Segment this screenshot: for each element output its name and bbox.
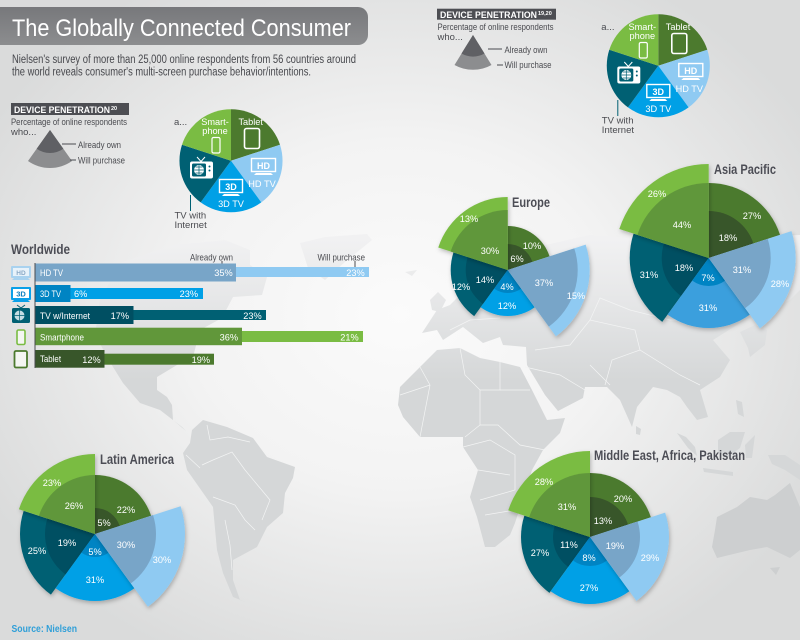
legend: device pie left: Internet xyxy=(174,220,207,231)
bar: 3D TV: 3D TV xyxy=(40,289,62,299)
legend: device pie left: Smart- xyxy=(201,117,229,127)
legend: device penetration left: Will purchase xyxy=(78,156,125,166)
values: 28% xyxy=(535,477,553,487)
bar: TV with internet: 23% xyxy=(243,311,262,321)
bar: tablet: 12% xyxy=(82,355,101,365)
values: 31% xyxy=(699,303,717,313)
legend: device pie right: 3D xyxy=(653,87,665,97)
legend: device pie right: Internet xyxy=(602,125,634,136)
icon: TV with internet xyxy=(12,305,30,323)
bar: smartphone: 21% xyxy=(340,332,359,342)
bar: HD TV: 23% xyxy=(346,268,365,278)
wedge: tablet xyxy=(590,473,651,537)
bar: smartphone: Smartphone xyxy=(40,332,84,342)
wedge: tablet xyxy=(95,475,151,534)
values: 27% xyxy=(531,548,549,558)
values: 28% xyxy=(771,279,789,289)
values: 12% xyxy=(498,301,516,311)
source note: Source: Nielsen xyxy=(12,624,77,635)
values: 12% xyxy=(452,282,470,292)
wedge: smartphone xyxy=(508,433,615,537)
intro text: the world reveals consumer's multi-screen purchase behavior/intentions. xyxy=(12,66,311,78)
legend: device penetration left xyxy=(10,103,129,168)
bar: tablet: Tablet xyxy=(40,354,61,364)
title banner: The Globally Connected Consumer xyxy=(12,15,351,42)
bar: 3D TV: 6% xyxy=(74,289,87,299)
wedge: smartphone xyxy=(438,181,529,270)
legend: device penetration left: who... xyxy=(10,127,36,138)
legend: device penetration right: Already own xyxy=(504,45,548,56)
wedge: HD TV xyxy=(590,513,688,608)
values xyxy=(452,214,585,311)
wedge: 3D TV xyxy=(655,258,750,354)
wedge: 3D TV xyxy=(538,537,629,629)
key labels: Will purchase xyxy=(318,252,365,264)
values: 13% xyxy=(460,214,478,224)
values: 22% xyxy=(117,505,135,515)
wedge: 3D TV xyxy=(43,534,134,626)
intro text: Nielsen's survey of more than 25,000 online respondents from 56 countries around xyxy=(12,54,356,66)
legend: device pie right: TV with xyxy=(602,116,633,126)
map country borders xyxy=(186,298,740,570)
wedge: TV with internet xyxy=(0,492,95,595)
key labels xyxy=(190,252,365,267)
values: 26% xyxy=(648,189,666,199)
values: 30% xyxy=(153,555,171,565)
wedge: TV with internet xyxy=(430,238,508,316)
bar: smartphone xyxy=(36,328,363,345)
wedge: HD TV xyxy=(709,231,800,337)
legend: device pie left: a... xyxy=(174,117,187,128)
values xyxy=(28,478,171,585)
values: 27% xyxy=(580,583,598,593)
legend: device penetration right xyxy=(436,9,556,71)
values: 10% xyxy=(523,241,541,251)
heading: Middle East, Africa, Pakistan: Middle East, Africa, Pakistan xyxy=(594,448,745,463)
values: 19% xyxy=(58,538,76,548)
values xyxy=(640,189,789,313)
legend: device pie right: Tablet xyxy=(666,22,691,32)
wedge: 3D TV xyxy=(472,270,535,333)
legend: device pie left: 3D TV xyxy=(218,199,245,209)
chart: Latin America xyxy=(0,437,207,626)
values: 31% xyxy=(640,270,658,280)
intro text xyxy=(12,54,356,78)
bar: HD TV xyxy=(36,264,369,282)
values: 5% xyxy=(97,518,111,528)
heading: Europe: Europe xyxy=(512,195,550,210)
icon: HD TV xyxy=(11,266,31,280)
wedge: TV with internet xyxy=(496,498,590,593)
chart: Asia Pacific xyxy=(601,144,800,354)
icon: 3D TV xyxy=(11,287,31,302)
wedge: HD TV xyxy=(508,245,610,344)
legend: device pie right: 3D TV xyxy=(645,104,672,114)
bar: TV with internet xyxy=(36,306,266,324)
legend: device pie left xyxy=(174,109,283,231)
values: 30% xyxy=(481,246,499,256)
values: 27% xyxy=(743,211,761,221)
legend: device penetration right: DEVICE PENETRATION xyxy=(440,10,537,21)
bar: TV with internet: 17% xyxy=(111,311,129,321)
bar: tablet xyxy=(36,350,214,368)
bar: 3D TV: 23% xyxy=(180,289,198,299)
values: 44% xyxy=(673,220,691,230)
legend: device pie left: Tablet xyxy=(238,117,263,127)
values: 15% xyxy=(567,291,585,301)
wedge: smartphone xyxy=(619,144,736,258)
legend: device penetration left: 20 xyxy=(111,106,117,112)
legend: device pie right: HD TV xyxy=(676,84,704,94)
values: 23% xyxy=(43,478,61,488)
bar: HD TV: 35% xyxy=(214,268,233,278)
values: 20% xyxy=(614,494,632,504)
values: 18% xyxy=(675,263,693,273)
key labels: Already own xyxy=(190,252,233,264)
title banner xyxy=(0,7,368,45)
values: 19% xyxy=(606,541,624,551)
values: 29% xyxy=(641,553,659,563)
values: 5% xyxy=(88,547,102,557)
icon: smartphone xyxy=(17,330,25,344)
values: 13% xyxy=(594,516,612,526)
icon: tablet xyxy=(14,351,27,368)
legend: device penetration left: Already own xyxy=(78,140,121,151)
bar: TV with internet: TV w/Internet xyxy=(40,311,90,321)
values: 25% xyxy=(28,546,46,556)
values: 14% xyxy=(476,275,494,285)
wedge: HD TV xyxy=(95,506,207,615)
heading: worldwide: Worldwide xyxy=(11,242,70,257)
chart: Middle East, Africa, Pakistan xyxy=(496,433,745,629)
chart: Europe xyxy=(430,181,610,344)
values xyxy=(531,477,659,593)
legend: device penetration left: DEVICE PENETRATION xyxy=(14,105,110,116)
icon: HD TV: HD xyxy=(16,270,26,277)
values: 4% xyxy=(500,282,514,292)
values: 30% xyxy=(117,540,135,550)
legend: device pie left: HD xyxy=(257,161,270,171)
bar: smartphone: 36% xyxy=(220,332,238,342)
wedge: tablet xyxy=(508,226,550,270)
legend: device pie right: phone xyxy=(630,31,655,41)
legend: device pie left: phone xyxy=(202,126,228,136)
legend: device pie right: Smart- xyxy=(629,22,656,32)
legend: device pie right xyxy=(601,14,710,136)
legend: device pie left: 3D xyxy=(225,182,237,192)
legend: device penetration left: Percentage of online respondents xyxy=(11,117,127,128)
legend: device pie right: HD xyxy=(684,66,698,76)
worldwide bar chart xyxy=(11,242,369,368)
values: 31% xyxy=(733,265,751,275)
legend: device pie left: TV with xyxy=(174,210,206,222)
legend: device penetration right: who... xyxy=(436,32,463,43)
legend: device penetration right: Will purchase xyxy=(504,60,552,71)
bar: 3D TV xyxy=(36,285,203,302)
heading: Asia Pacific: Asia Pacific xyxy=(714,162,776,177)
values: 8% xyxy=(582,553,596,563)
values: 18% xyxy=(719,233,737,243)
wedge: tablet xyxy=(709,183,780,258)
values: 31% xyxy=(86,575,104,585)
world map background xyxy=(95,234,800,603)
wedge: smartphone xyxy=(19,437,119,534)
legend: device pie right: a... xyxy=(601,22,615,33)
bar: HD TV: HD TV xyxy=(40,268,64,278)
legend: device pie left: HD TV xyxy=(248,179,277,189)
bar: tablet: 19% xyxy=(192,355,210,365)
wedge: TV with internet xyxy=(601,214,709,322)
values: 31% xyxy=(558,502,576,512)
heading: Latin America: Latin America xyxy=(100,452,174,467)
values: 26% xyxy=(65,501,83,511)
values: 6% xyxy=(510,254,524,264)
values: 37% xyxy=(535,278,553,288)
values: 7% xyxy=(701,273,715,283)
legend: device penetration right: 19,20 xyxy=(538,11,552,17)
legend: device penetration right: Percentage of online respondents xyxy=(438,22,554,33)
icon: 3D TV: 3D xyxy=(16,290,26,298)
values: 11% xyxy=(560,540,578,550)
